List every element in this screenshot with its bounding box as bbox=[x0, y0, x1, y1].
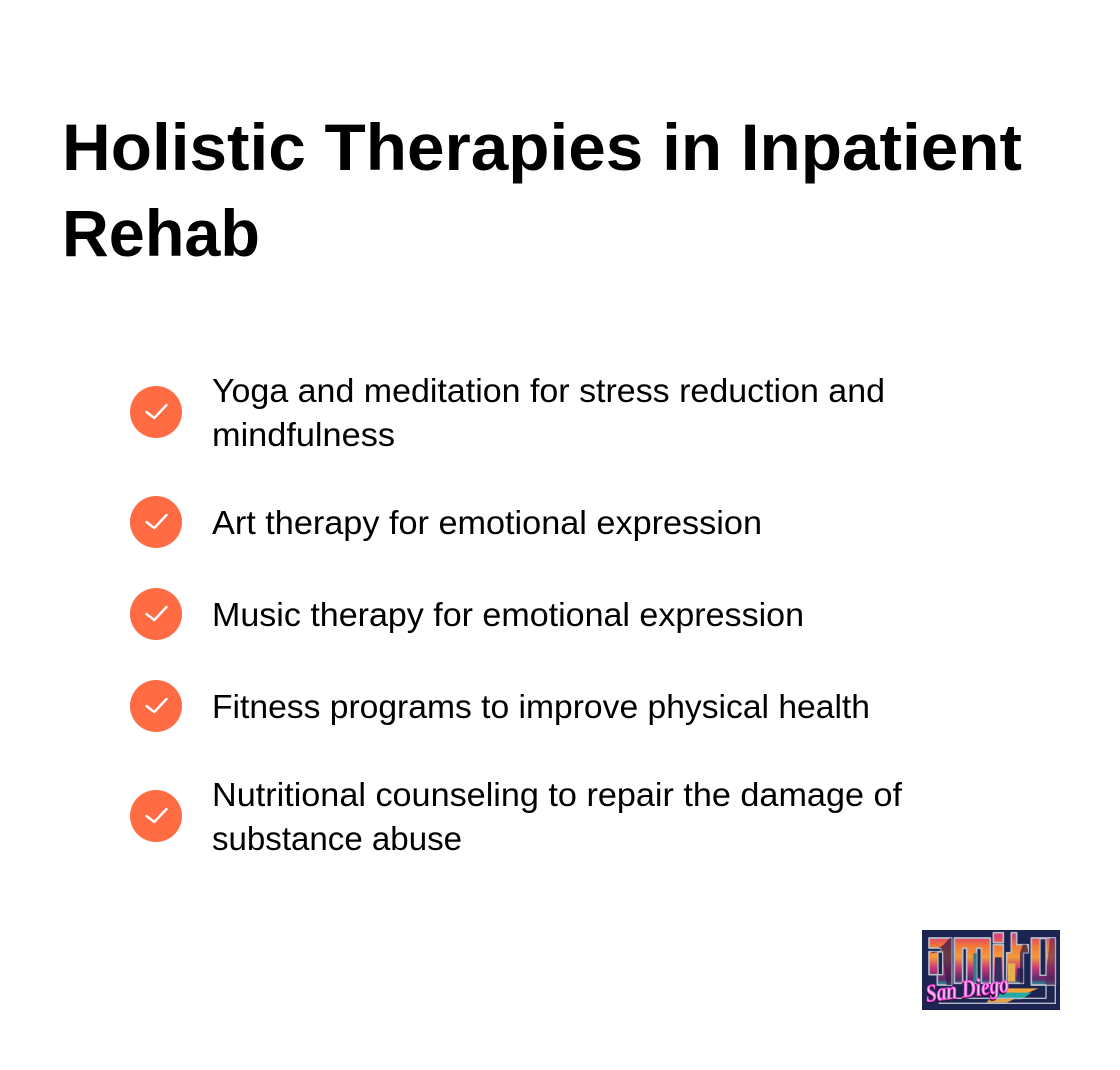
title bbox=[62, 110, 1022, 270]
item: fitness programs bbox=[130, 680, 870, 732]
beach stripes bbox=[987, 988, 1038, 1003]
item: art therapy bbox=[130, 496, 762, 548]
item: nutritional counseling: substance abuse bbox=[212, 820, 462, 857]
item: yoga and meditation: Yoga and meditation for stress reduction and bbox=[212, 372, 885, 409]
item: nutritional counseling: Nutritional counseling to repair the damage of bbox=[212, 776, 903, 813]
letter shapes bbox=[929, 933, 1055, 985]
script: San Diego: San Diego bbox=[924, 973, 1010, 1010]
title: Holistic Therapies in Inpatient bbox=[62, 110, 1022, 184]
checklist bbox=[130, 372, 903, 857]
item: music therapy bbox=[130, 588, 804, 640]
item: art therapy: Art therapy for emotional expression bbox=[212, 504, 762, 541]
skyline and palm silhouettes bbox=[930, 938, 1055, 985]
item: nutritional counseling bbox=[130, 776, 903, 857]
item: yoga and meditation bbox=[130, 372, 885, 453]
item: fitness programs: Fitness programs to improve physical health bbox=[212, 688, 870, 725]
letter cut-outs and y tail bbox=[938, 939, 1055, 1003]
title: Rehab bbox=[62, 196, 260, 270]
logo: Amity San Diego bbox=[922, 930, 1060, 1010]
item: yoga and meditation: mindfulness bbox=[212, 416, 395, 453]
item: music therapy: Music therapy for emotional expression bbox=[212, 596, 804, 633]
script: San Diego: San Diego bbox=[924, 971, 1010, 1008]
